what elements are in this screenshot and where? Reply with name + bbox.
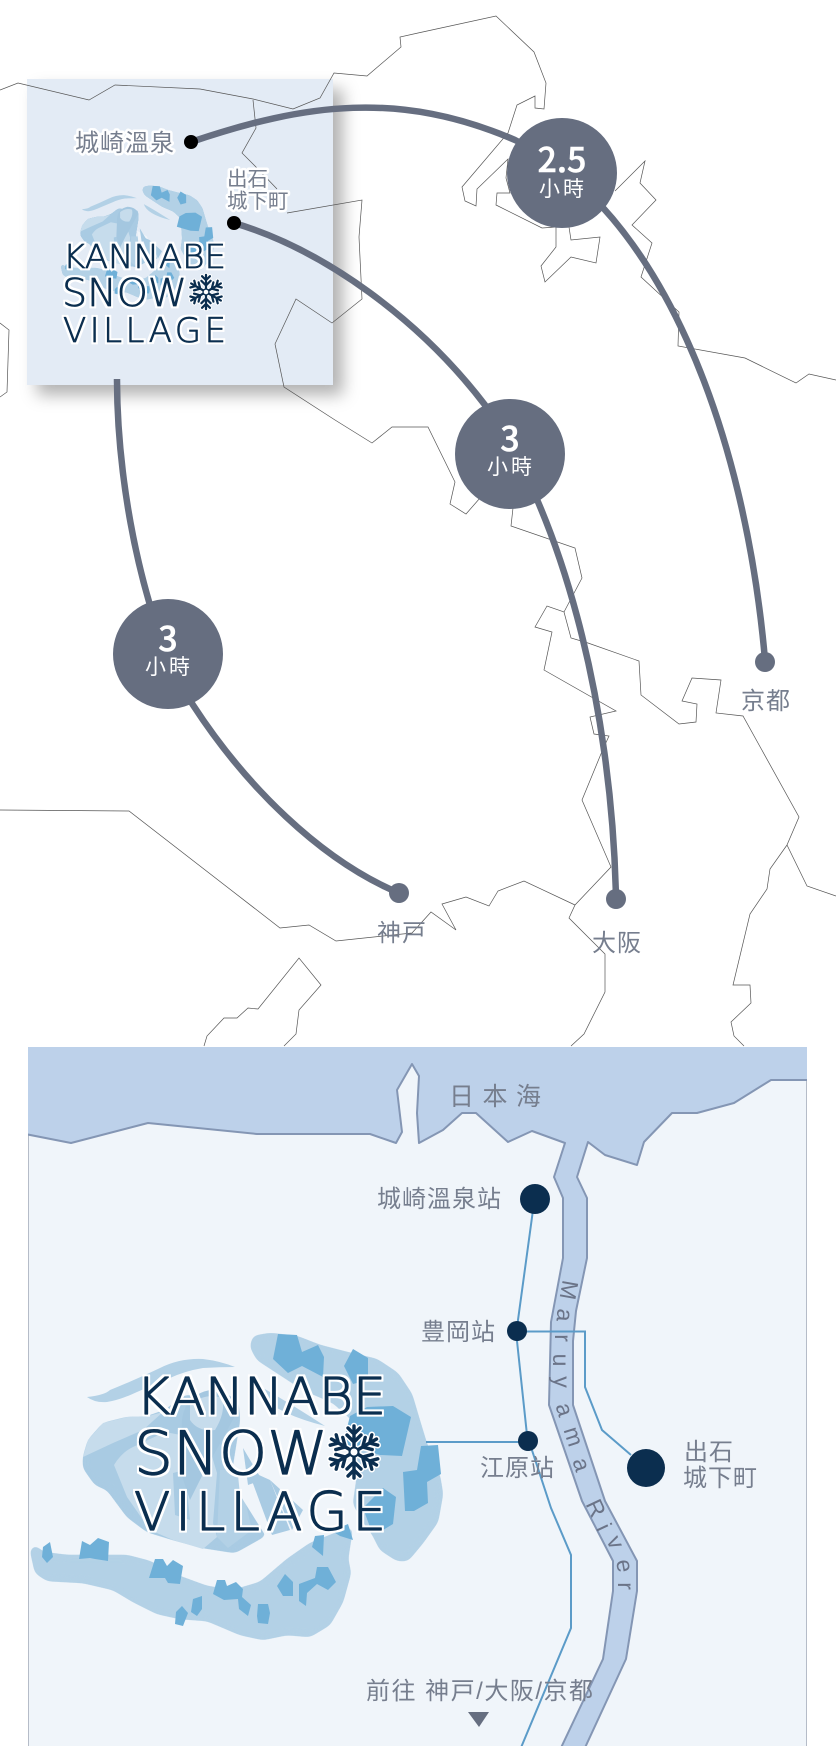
label: Kinosaki Onsen station: 城崎溫泉站 bbox=[377, 1186, 502, 1213]
marker: Kobe bbox=[389, 883, 409, 903]
logo: small Kannabe Snow Village: KANNABE bbox=[63, 237, 226, 276]
station: Kinosaki Onsen bbox=[520, 1184, 550, 1214]
logo: large Kannabe Snow Village: SNOW bbox=[134, 1419, 328, 1489]
station: Toyooka bbox=[507, 1321, 527, 1341]
label: Izushi castle town: 城下町 bbox=[227, 190, 288, 213]
illustration: large ski resort bbox=[30, 1333, 443, 1640]
badge: 3 hours to Kobe bbox=[113, 599, 223, 709]
badge: 2.5 hours: 2.5 bbox=[538, 133, 586, 182]
badge: 2.5 hours: 小時 bbox=[539, 178, 587, 201]
logo: large Kannabe Snow Village: KANNABE bbox=[136, 1368, 386, 1427]
badge: 3 hours to Osaka bbox=[455, 399, 565, 509]
marker: Izushi bbox=[227, 216, 241, 230]
badge: 3 hours to Kobe: 3 bbox=[158, 612, 178, 661]
label: Izushi castle town: 城下町 bbox=[683, 1465, 758, 1492]
logo: large Kannabe Snow Village bbox=[134, 1368, 386, 1543]
label: Ebara station: 江原站 bbox=[480, 1455, 555, 1482]
route: Kinosaki to Kyoto bbox=[191, 108, 765, 660]
route: Izushi to Osaka bbox=[234, 223, 616, 899]
badge: 2.5 hours bbox=[507, 118, 617, 228]
sea and Maruyama River bbox=[20, 1030, 815, 1752]
route: resort to Kobe bbox=[117, 379, 399, 893]
label: Toyooka station: 豊岡站 bbox=[421, 1319, 496, 1346]
logo: small Kannabe Snow Village: SNOW bbox=[62, 271, 187, 315]
panel: Kannabe Snow Village highlight square bbox=[27, 79, 333, 385]
label: to Kobe, Osaka, Kyoto: 前往 神戸/大阪/京都 bbox=[366, 1678, 595, 1705]
marker: Osaka bbox=[606, 889, 626, 909]
label: Izushi castle town: 出石 bbox=[684, 1439, 734, 1466]
label: Maruyama River: Maruyama River bbox=[548, 1278, 639, 1590]
label: Sea of Japan: 日本海 bbox=[449, 1083, 550, 1111]
badge: 3 hours to Kobe: 小時 bbox=[145, 656, 193, 679]
arrow: down triangle bbox=[468, 1712, 489, 1727]
label: Kobe: 神戸 bbox=[377, 920, 427, 947]
marker: Kinosaki Onsen bbox=[184, 135, 198, 149]
regional map outlines bbox=[0, 16, 836, 1046]
logo: small Kannabe Snow Village bbox=[62, 237, 226, 351]
logo: small Kannabe Snow Village: VILLAGE bbox=[63, 311, 226, 351]
label: Kinosaki Onsen: 城崎溫泉 bbox=[75, 130, 175, 157]
rail lines bbox=[426, 1210, 631, 1750]
badge: 3 hours to Osaka: 小時 bbox=[487, 456, 535, 479]
station: Izushi bbox=[627, 1449, 665, 1487]
badge: 3 hours to Osaka: 3 bbox=[500, 412, 520, 461]
label: Kyoto: 京都 bbox=[741, 688, 791, 715]
illustration: small ski resort bbox=[61, 186, 214, 299]
logo: large Kannabe Snow Village: VILLAGE bbox=[134, 1482, 386, 1543]
station: Ebara bbox=[518, 1431, 538, 1451]
label: Osaka: 大阪 bbox=[592, 930, 642, 957]
panel: local area map bbox=[20, 1030, 815, 1752]
label: Izushi castle town: 出石 bbox=[227, 168, 268, 191]
marker: Kyoto bbox=[755, 652, 775, 672]
